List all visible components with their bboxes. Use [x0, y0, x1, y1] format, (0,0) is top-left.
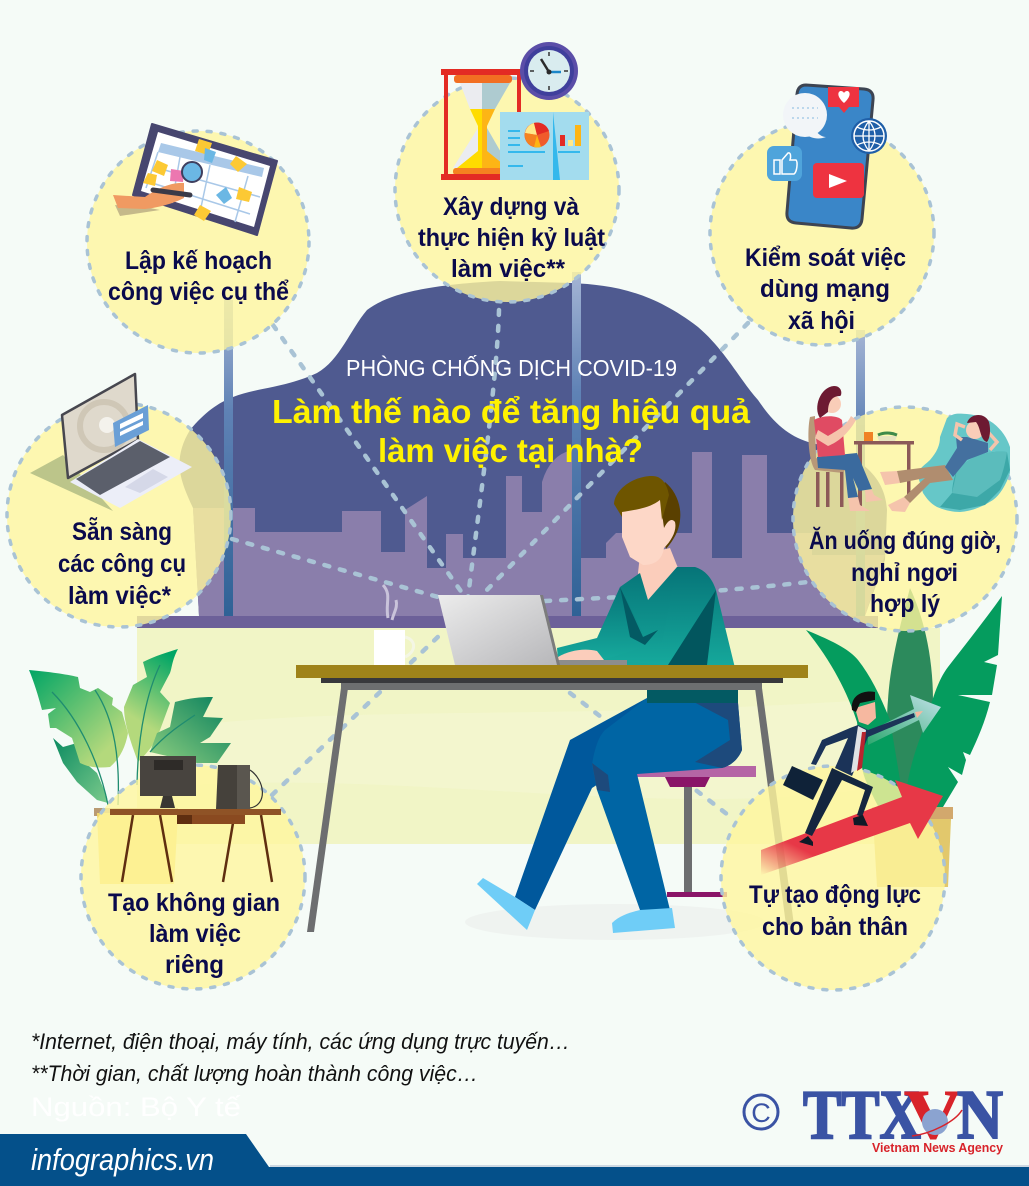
person: knee shade	[592, 763, 610, 792]
right plant	[806, 588, 1002, 812]
logo TTXVN: N	[957, 1077, 1003, 1154]
label: hợp lý	[870, 590, 940, 618]
person: hip shade	[690, 700, 742, 768]
left plant	[29, 649, 231, 805]
label	[108, 889, 280, 979]
label: Tạo không gian	[108, 889, 280, 917]
label: dùng mạng	[760, 275, 890, 303]
copyright symbol: C	[751, 1098, 771, 1128]
footnotes: *Internet, điện thoại, máy tính, các ứng dụng trực tuyến…	[31, 1029, 570, 1054]
circle: work discipline	[395, 42, 619, 302]
person: hand	[558, 650, 604, 662]
person: thigh and near leg	[592, 698, 742, 910]
person: lower torso	[647, 688, 738, 703]
person: shirt chest	[558, 567, 735, 668]
footnotes	[31, 1029, 570, 1086]
label: Ăn uống đúng giờ,	[809, 526, 1001, 555]
label: các công cụ	[58, 550, 186, 578]
person: arm	[557, 587, 662, 660]
title: Làm thế nào để tăng hiệu quả	[272, 393, 751, 430]
icon: hourglass	[441, 69, 524, 180]
label: riêng	[165, 951, 224, 979]
person: face	[622, 498, 675, 565]
right plant pot	[872, 807, 953, 887]
person: sleeve	[603, 567, 716, 665]
icon: tablet planner	[113, 124, 277, 235]
icon: smartphone	[767, 85, 887, 228]
floor shadow	[465, 904, 765, 940]
person: chest shadow	[620, 587, 658, 645]
person: far leg	[515, 698, 647, 910]
label: nghỉ ngơi	[851, 559, 958, 587]
footer site name: infographics.vn	[31, 1142, 214, 1177]
label: công việc cụ thể	[108, 278, 289, 306]
icon: clock	[520, 42, 578, 100]
icon: small desk with computer	[110, 756, 281, 882]
label	[809, 526, 1001, 618]
desk	[296, 665, 808, 932]
window sill	[137, 616, 878, 628]
icon: woman on beanbag	[880, 414, 1010, 512]
label: Xây dựng và	[443, 193, 579, 221]
icon: businessman	[783, 692, 923, 846]
laptop	[438, 595, 627, 665]
circle: private workspace	[81, 756, 305, 989]
label	[108, 247, 289, 306]
label: cho bản thân	[762, 913, 908, 941]
wall light bands	[137, 695, 940, 799]
title: làm việc tại nhà?	[378, 432, 643, 469]
window frame poles	[224, 272, 865, 616]
label: Sẵn sàng	[72, 516, 172, 546]
icon: woman at table	[808, 386, 914, 511]
label	[58, 516, 186, 610]
label	[749, 881, 921, 941]
label: làm việc*	[68, 582, 171, 610]
person: back hair	[655, 482, 680, 549]
person working	[477, 476, 742, 933]
person: sleeve shadow	[668, 590, 716, 665]
icon: green pointer arrow	[868, 695, 941, 745]
title: PHÒNG CHỐNG DỊCH COVID-19	[346, 354, 677, 381]
label: làm việc	[149, 920, 241, 948]
circle: self motivation	[721, 692, 945, 990]
circle: ready tools	[7, 374, 231, 627]
icon: laptop with login	[30, 374, 192, 511]
coffee mug	[374, 585, 414, 665]
person: shoes	[477, 878, 675, 933]
logo TTXVN: V	[904, 1077, 962, 1154]
label	[745, 244, 906, 335]
icon: red rising arrow	[761, 780, 943, 875]
backdrop: city skyline	[193, 450, 885, 616]
logo TTXVN: Vietnam News Agency	[872, 1140, 1004, 1155]
person: hair	[614, 476, 669, 520]
wall	[137, 628, 940, 844]
stool	[637, 766, 756, 897]
label: làm việc**	[451, 255, 565, 283]
label: Tự tạo động lực	[749, 881, 921, 909]
circle: make a plan	[87, 124, 309, 353]
label: xã hội	[788, 307, 855, 335]
person: neck	[638, 548, 678, 602]
label	[418, 193, 606, 283]
footnotes: **Thời gian, chất lượng hoàn thành công việc…	[31, 1061, 478, 1086]
source: Nguồn: Bộ Y tế	[31, 1092, 241, 1122]
icon: report chart	[500, 112, 589, 180]
circle: eat and rest	[793, 386, 1017, 631]
logo TTXVN: TTX	[803, 1077, 921, 1154]
circle: social media control	[710, 85, 934, 345]
footer band	[0, 1134, 1029, 1186]
label: Kiểm soát việc	[745, 244, 906, 272]
label: Lập kế hoạch	[125, 247, 272, 275]
left plant pot	[94, 808, 178, 884]
copyright symbol	[744, 1095, 778, 1129]
backdrop: hill blob	[180, 281, 887, 616]
label: thực hiện kỷ luật	[418, 224, 606, 252]
title	[272, 354, 751, 469]
connector lines	[232, 310, 808, 818]
